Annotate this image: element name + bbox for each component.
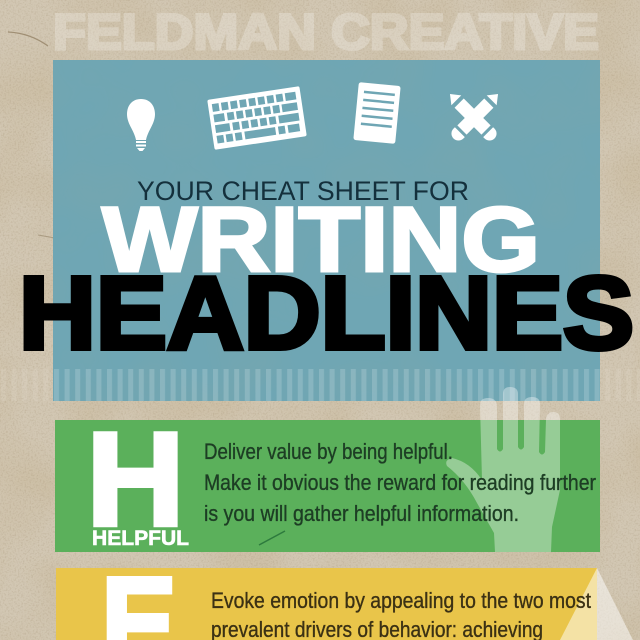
body text: helpful: Deliver value by being helpful.	[204, 439, 453, 464]
label: helpful: HELPFUL	[92, 527, 189, 550]
body text: helpful	[204, 439, 596, 526]
letter H: H	[86, 406, 184, 554]
panel: blue header	[53, 60, 600, 401]
blue panel texture	[53, 60, 600, 401]
icon: hand	[446, 387, 560, 552]
decorative stripe band	[53, 369, 600, 401]
icon: triangle	[560, 568, 633, 640]
body text: helpful: is you will gather helpful information.	[204, 501, 519, 526]
subtitle: YOUR CHEAT SHEET FOR	[137, 176, 469, 206]
heading: writing: WRITING	[102, 189, 540, 291]
body text: helpful: Make it obvious the reward for reading further	[204, 470, 596, 495]
panel: emotional	[56, 568, 633, 640]
heading: headlines: HEADLINES	[19, 256, 634, 370]
icon: crossed pencils	[445, 89, 503, 143]
body text: emotional first line: Evoke emotion by appealing to the two most	[211, 588, 591, 613]
icon: page of text	[353, 82, 401, 144]
panel: helpful	[55, 387, 600, 554]
icon: keyboard	[207, 86, 307, 150]
icon: light bulb	[127, 99, 155, 151]
brand watermark: FELDMAN CREATIVE	[53, 4, 599, 60]
